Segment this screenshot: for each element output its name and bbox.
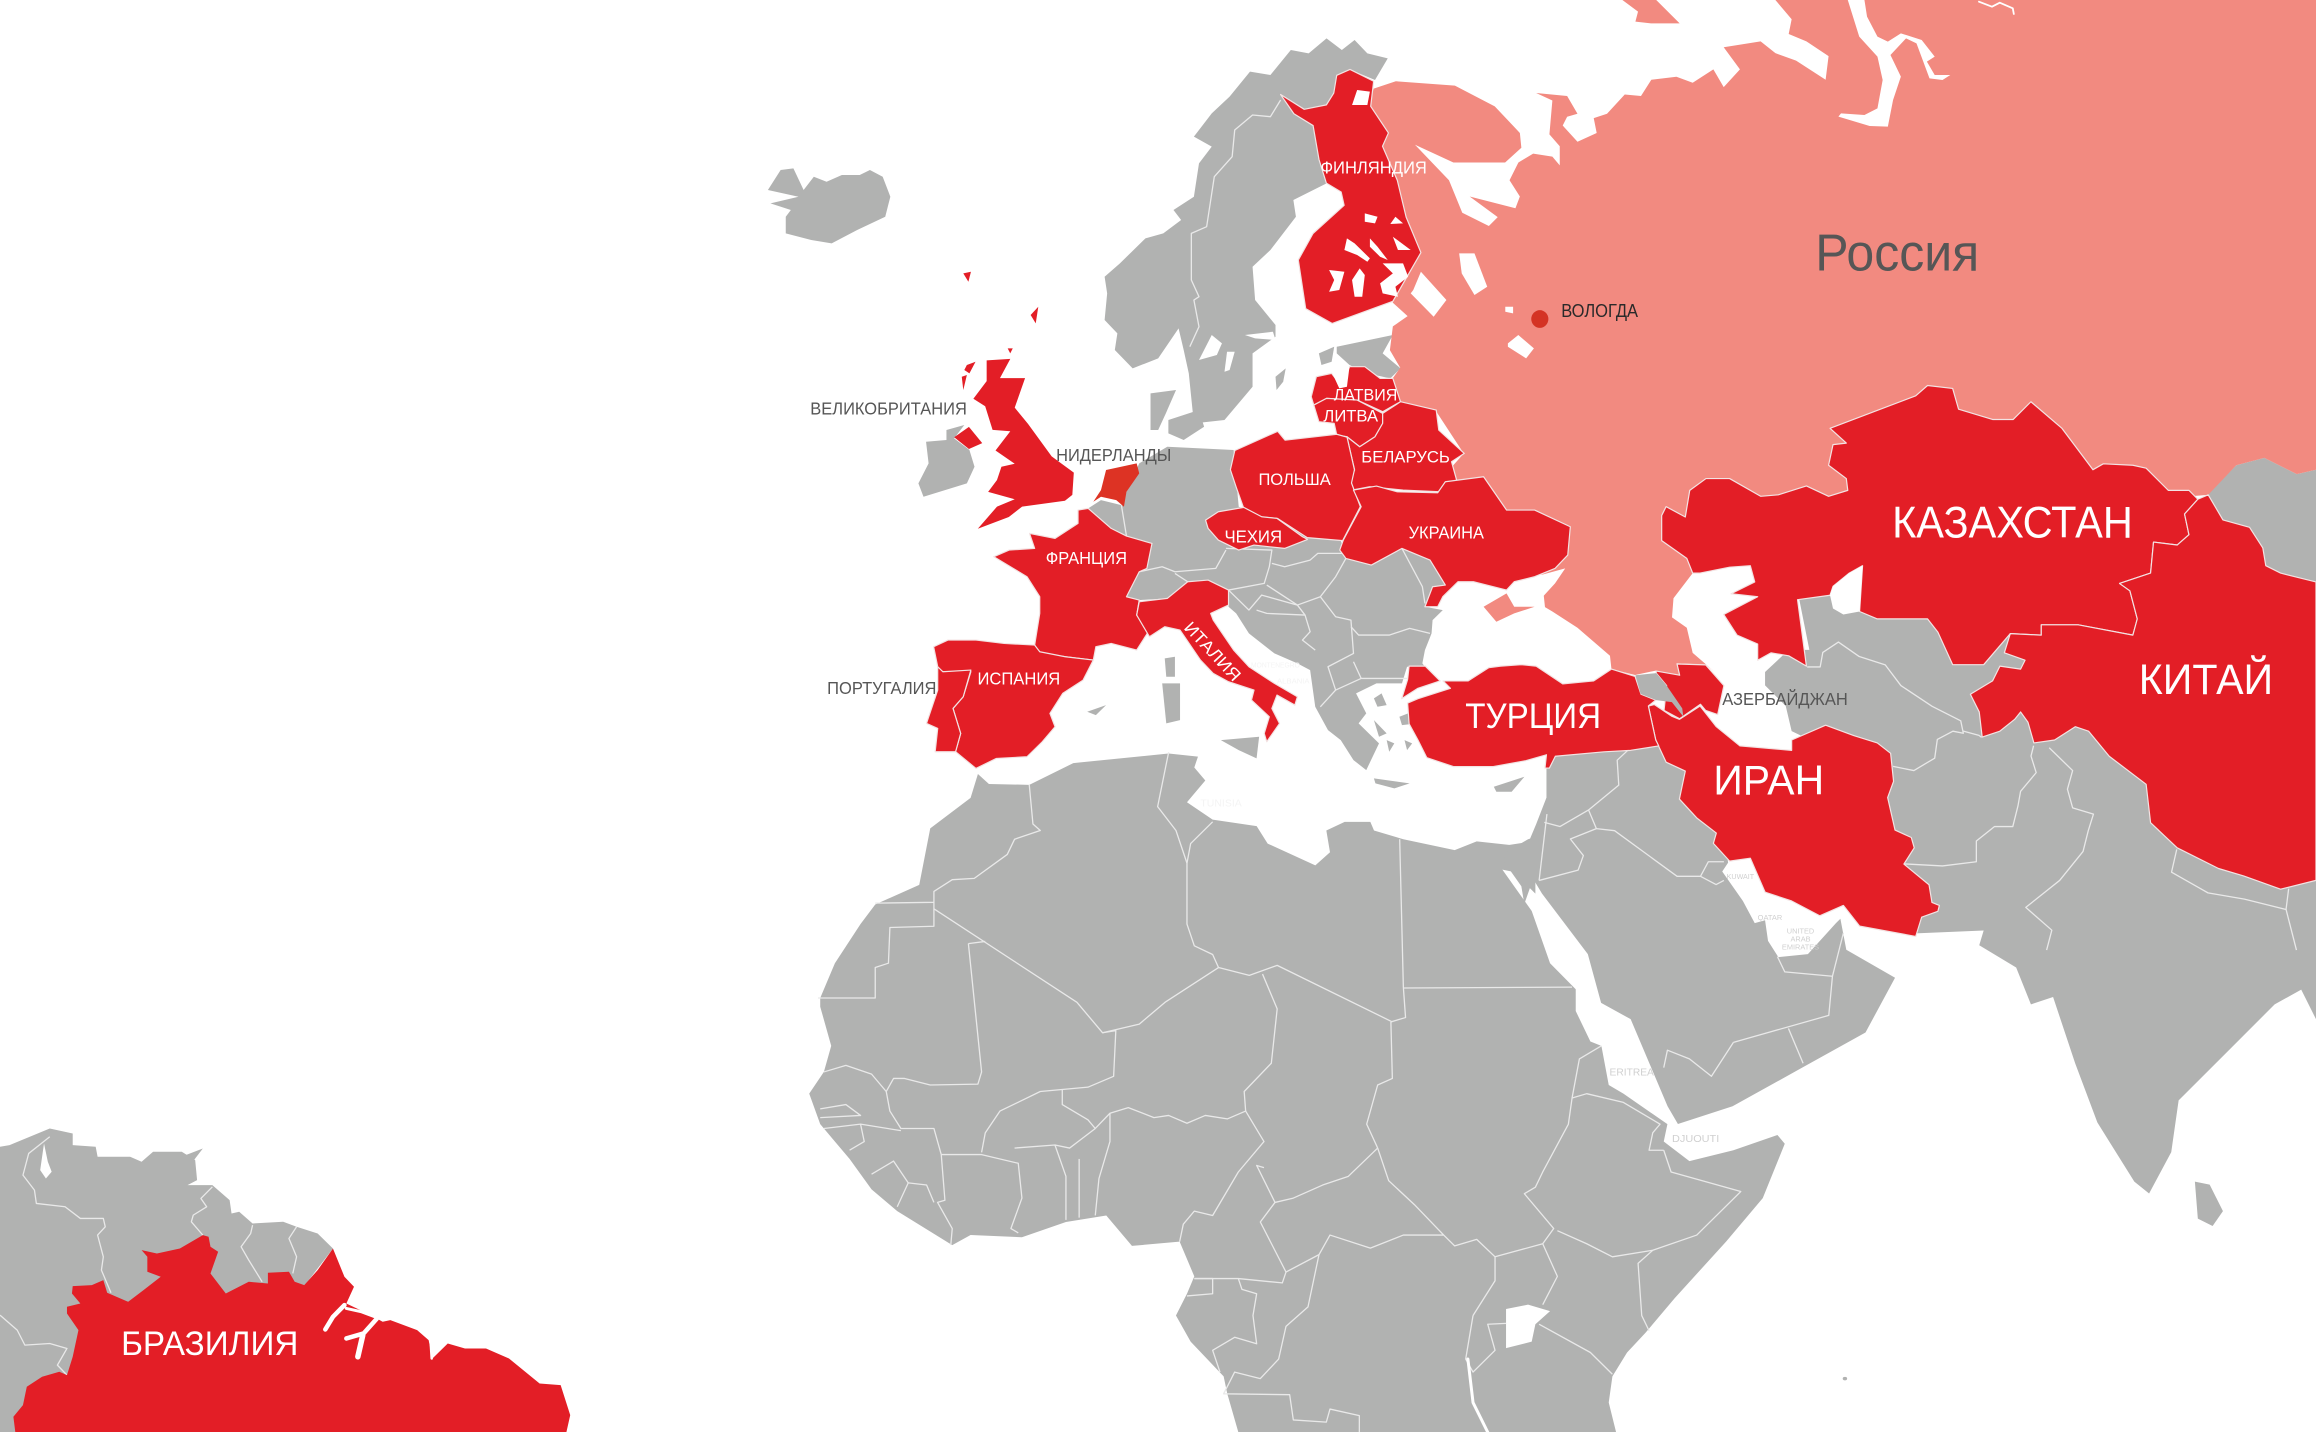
France	[994, 508, 1152, 660]
label: United Arab Emirates: EMIRATES	[1782, 943, 1819, 952]
Mediterranean islands	[1165, 657, 1175, 677]
label: Qatar: QATAR	[1758, 913, 1782, 922]
Gulf of Riga	[1332, 367, 1349, 388]
Lake Tanganyika	[1468, 1359, 1488, 1432]
label: Belarus: БЕЛАРУСЬ	[1361, 447, 1450, 466]
label: Tunisia: TUNISIA	[1200, 798, 1242, 809]
Georgia and Armenia	[1635, 673, 1683, 717]
Poland	[1230, 431, 1360, 541]
Sea of Azov	[1507, 568, 1565, 608]
European Turkey	[1402, 666, 1440, 699]
Belarus	[1347, 402, 1464, 492]
label: United Arab Emirates: UNITED	[1787, 926, 1814, 935]
Novaya Zemlya	[1622, 0, 1680, 23]
label: Iran: ИРАН	[1713, 758, 1824, 804]
Turkey	[1408, 665, 1659, 768]
label: Portugal: ПОРТУГАЛИЯ	[827, 678, 936, 698]
label: Turkey: ТУРЦИЯ	[1465, 696, 1601, 736]
United Kingdom	[954, 272, 1074, 529]
Netherlands	[1093, 463, 1139, 507]
Middle East	[1504, 743, 1895, 1124]
Crimea	[1484, 593, 1535, 622]
Aral Sea	[1830, 566, 1863, 614]
Baltic states and Belarus	[1311, 367, 1464, 492]
label: Great Britain: ВЕЛИКОБРИТАНИЯ	[810, 398, 967, 418]
label: France: ФРАНЦИЯ	[1046, 548, 1127, 568]
northern South America	[0, 1128, 333, 1432]
label: Czech Republic: ЧЕХИЯ	[1224, 526, 1282, 546]
label: Kazakhstan: КАЗАХСТАН	[1892, 499, 2133, 548]
Madagascar speck	[1843, 1377, 1847, 1380]
label: Poland: ПОЛЬША	[1258, 470, 1331, 489]
Lithuania	[1314, 398, 1383, 447]
Finland	[1281, 69, 1421, 323]
Iran	[1648, 705, 1939, 936]
Mongolia	[2207, 458, 2316, 591]
label: Russia: Россия	[1815, 223, 1979, 281]
label: Ukraine: УКРАИНА	[1409, 522, 1484, 542]
label: Vologda: ВОЛОГДА	[1561, 300, 1639, 321]
label: Eritrea: ERITREA	[1610, 1067, 1654, 1078]
Denmark	[1151, 390, 1176, 430]
label: Lithuania: ЛИТВА	[1323, 407, 1379, 426]
Kazakhstan	[1662, 386, 2198, 666]
Italy	[1137, 580, 1297, 742]
Sri Lanka	[2195, 1182, 2223, 1226]
Estonia	[1337, 335, 1401, 378]
label: Spain: ИСПАНИЯ	[978, 668, 1060, 688]
label: Montenegro: MONTENEGRO	[1251, 661, 1300, 670]
Brazil	[13, 1235, 570, 1432]
label: China: КИТАЙ	[2139, 655, 2273, 704]
Iceland	[768, 168, 890, 243]
label: Netherlands: НИДЕРЛАНДЫ	[1056, 445, 1171, 465]
Latvia	[1311, 367, 1401, 412]
Scandinavia	[918, 38, 1401, 497]
Aegean islands	[1374, 693, 1387, 707]
Ireland	[918, 425, 975, 497]
country labels	[121, 157, 2273, 1363]
Lake Victoria	[1506, 1305, 1550, 1348]
label: Albania: ALBANIA	[1277, 676, 1310, 685]
label: Brazil: БРАЗИЛИЯ	[121, 1325, 298, 1363]
Africa	[809, 752, 1847, 1432]
Azerbaijan	[1656, 664, 1724, 719]
Arctic gulfs and inland lakes	[1505, 0, 2014, 358]
label: Latvia: ЛАТВИЯ	[1334, 385, 1397, 404]
city marker: Vologda	[1531, 310, 1548, 328]
Ukraine	[1340, 477, 1570, 607]
label: Djibouti: DJUOUTI	[1672, 1134, 1719, 1145]
Gotland	[1276, 368, 1286, 390]
Russia	[1368, 0, 2316, 675]
label: Italy: ИТАЛИЯ	[1180, 618, 1244, 685]
Czech Republic	[1206, 507, 1308, 550]
label: Kuwait: KUWAIT	[1727, 872, 1755, 881]
label: Azerbaijan: АЗЕРБАЙДЖАН	[1722, 689, 1848, 709]
China	[1970, 495, 2316, 889]
label: United Arab Emirates: ARAB	[1790, 935, 1811, 944]
label: Finland: ФИНЛЯНДИЯ	[1320, 157, 1427, 177]
Portugal	[926, 667, 971, 752]
continental Europe and islands	[1087, 447, 1524, 792]
Spain	[934, 640, 1093, 768]
Central and South Asia	[1765, 591, 2316, 1193]
